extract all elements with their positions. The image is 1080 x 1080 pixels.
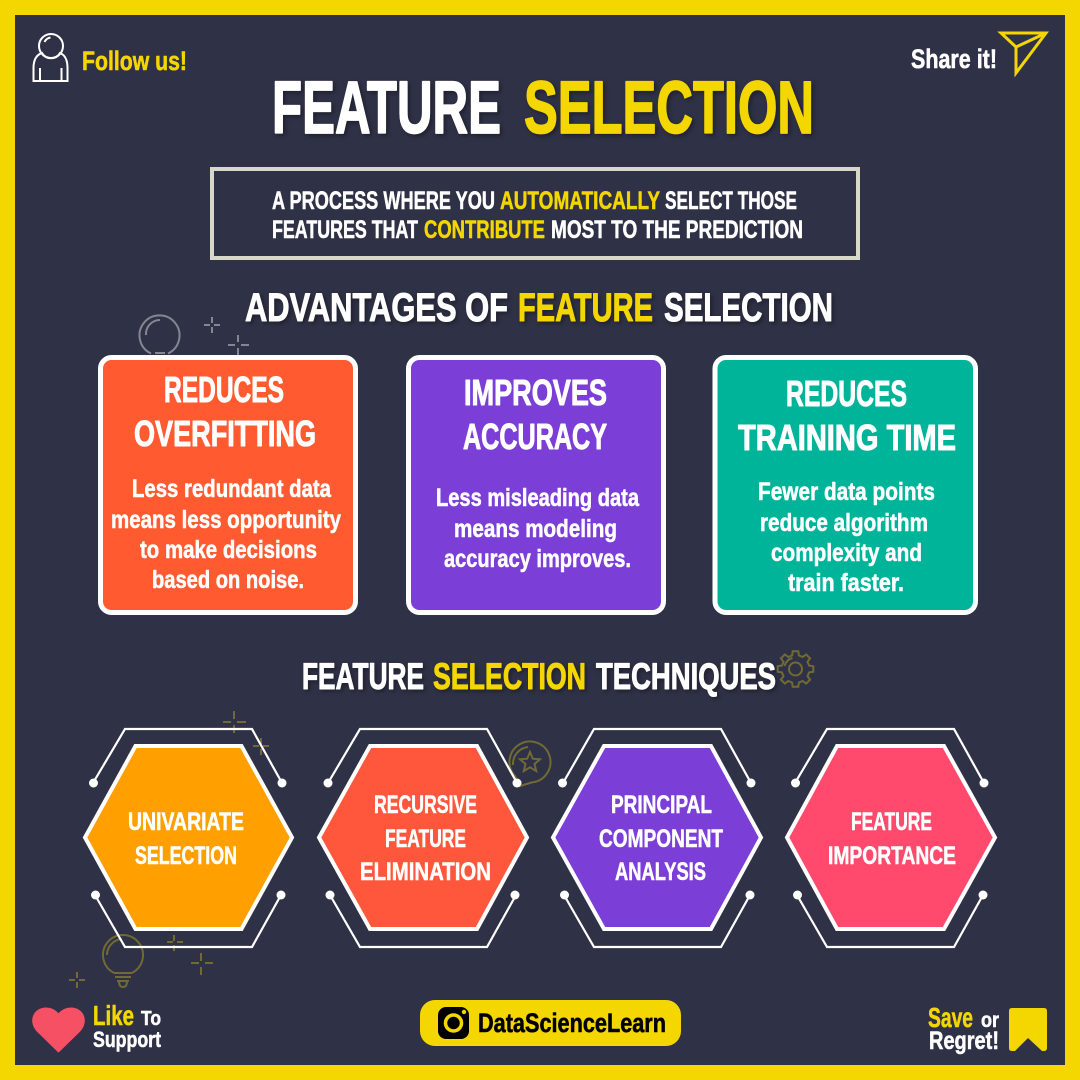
- definition text: CONTRIBUTE: [424, 216, 545, 244]
- title: [272, 66, 814, 149]
- card body: [111, 475, 341, 594]
- icon: sparkles: [223, 711, 269, 755]
- definition text: A PROCESS WHERE YOU: [272, 187, 495, 215]
- card body: Less redundant data: [132, 475, 332, 503]
- panel: reduces overfitting: [100, 358, 356, 612]
- icon: light bulb and sparkles: [69, 935, 213, 988]
- panel: improves accuracy: [408, 358, 664, 612]
- panel: reduces training time: [715, 358, 976, 612]
- connector lines: [324, 729, 522, 947]
- save text: or: [981, 1009, 999, 1032]
- card body: [436, 484, 640, 573]
- save text: [928, 1002, 999, 1055]
- label: SELECTION: [135, 842, 237, 870]
- label: FEATURE: [385, 825, 466, 853]
- connector lines: [558, 729, 756, 947]
- technique: feature importance: [787, 729, 995, 947]
- definition text: SELECT THOSE: [665, 187, 797, 215]
- like text: Support: [93, 1027, 162, 1052]
- connector lines: [89, 729, 286, 947]
- card body: Less misleading data: [436, 484, 640, 512]
- title: FEATURE: [272, 66, 501, 149]
- heading: techniques: [302, 656, 776, 697]
- card heading: TRAINING TIME: [738, 417, 956, 458]
- technique: recursive feature elimination: [319, 729, 527, 947]
- icon: gear: [778, 651, 813, 687]
- label: UNIVARIATE: [128, 808, 244, 836]
- card body: means modeling: [454, 515, 617, 543]
- title: SELECTION: [524, 66, 814, 149]
- icon: instagram: [438, 1007, 469, 1039]
- hexagon: [85, 746, 292, 929]
- card body: Fewer data points: [758, 478, 935, 506]
- heading: techniques: TECHNIQUES: [596, 656, 776, 697]
- follow us badge: [34, 34, 187, 81]
- handle text: DataScienceLearn: [478, 1008, 666, 1038]
- card body: train faster.: [788, 569, 904, 597]
- like text: Like: [93, 1000, 134, 1031]
- technique: principal component analysis: [553, 729, 761, 947]
- heading: advantages: FEATURE: [518, 286, 653, 330]
- instagram handle pill: [420, 1000, 681, 1046]
- heading: advantages: [245, 286, 833, 330]
- icon: heart: [33, 1008, 84, 1052]
- label: [128, 808, 244, 870]
- heading: advantages: SELECTION: [664, 286, 833, 330]
- share it text: Share it!: [911, 44, 997, 74]
- label: IMPORTANCE: [828, 842, 956, 870]
- hexagon: [553, 746, 761, 929]
- card heading: [463, 372, 607, 457]
- heading: techniques: FEATURE: [302, 656, 424, 697]
- heading: techniques: SELECTION: [433, 656, 586, 697]
- card body: to make decisions: [140, 536, 317, 564]
- label: [599, 791, 723, 886]
- share it badge: [911, 33, 1046, 74]
- card heading: [134, 369, 316, 454]
- label: PRINCIPAL: [611, 791, 712, 819]
- card body: [758, 478, 935, 597]
- like text: To: [141, 1008, 161, 1030]
- card heading: REDUCES: [164, 369, 284, 410]
- technique: univariate selection: [85, 729, 292, 947]
- icon: faded light bulb and sparkles: [140, 315, 249, 355]
- icon: paper plane: [1001, 33, 1046, 73]
- label: COMPONENT: [599, 825, 723, 853]
- like text: [93, 1000, 162, 1052]
- definition text: FEATURES THAT: [272, 216, 418, 244]
- icon: star speech bubble: [509, 742, 550, 786]
- card heading: IMPROVES: [464, 372, 607, 413]
- hexagon: [787, 746, 995, 929]
- definition box: [212, 169, 858, 258]
- hexagon: [319, 746, 527, 929]
- save text: Save: [928, 1002, 973, 1033]
- label: [828, 808, 956, 870]
- label: ELIMINATION: [360, 858, 491, 886]
- label: RECURSIVE: [374, 791, 477, 819]
- label: FEATURE: [851, 808, 932, 836]
- definition text: MOST TO THE PREDICTION: [551, 216, 803, 244]
- save text: Regret!: [929, 1027, 999, 1055]
- definition text: [272, 187, 803, 244]
- heading: advantages: ADVANTAGES OF: [245, 286, 508, 330]
- card heading: [738, 373, 956, 458]
- save or regret badge: [928, 1002, 1047, 1055]
- icon: person: [34, 34, 68, 81]
- label: [360, 791, 491, 886]
- card body: means less opportunity: [111, 506, 341, 534]
- icon: bookmark: [1009, 1008, 1047, 1051]
- card body: based on noise.: [152, 566, 304, 594]
- card body: complexity and: [771, 539, 922, 567]
- like to support badge: [33, 1000, 162, 1052]
- card heading: ACCURACY: [463, 416, 607, 457]
- label: ANALYSIS: [615, 858, 706, 886]
- card heading: OVERFITTING: [134, 413, 316, 454]
- definition text: AUTOMATICALLY: [500, 187, 660, 215]
- follow us text: Follow us!: [82, 46, 187, 76]
- card body: reduce algorithm: [760, 509, 928, 537]
- connector lines: [791, 729, 988, 947]
- card heading: REDUCES: [786, 373, 907, 414]
- card body: accuracy improves.: [444, 545, 631, 573]
